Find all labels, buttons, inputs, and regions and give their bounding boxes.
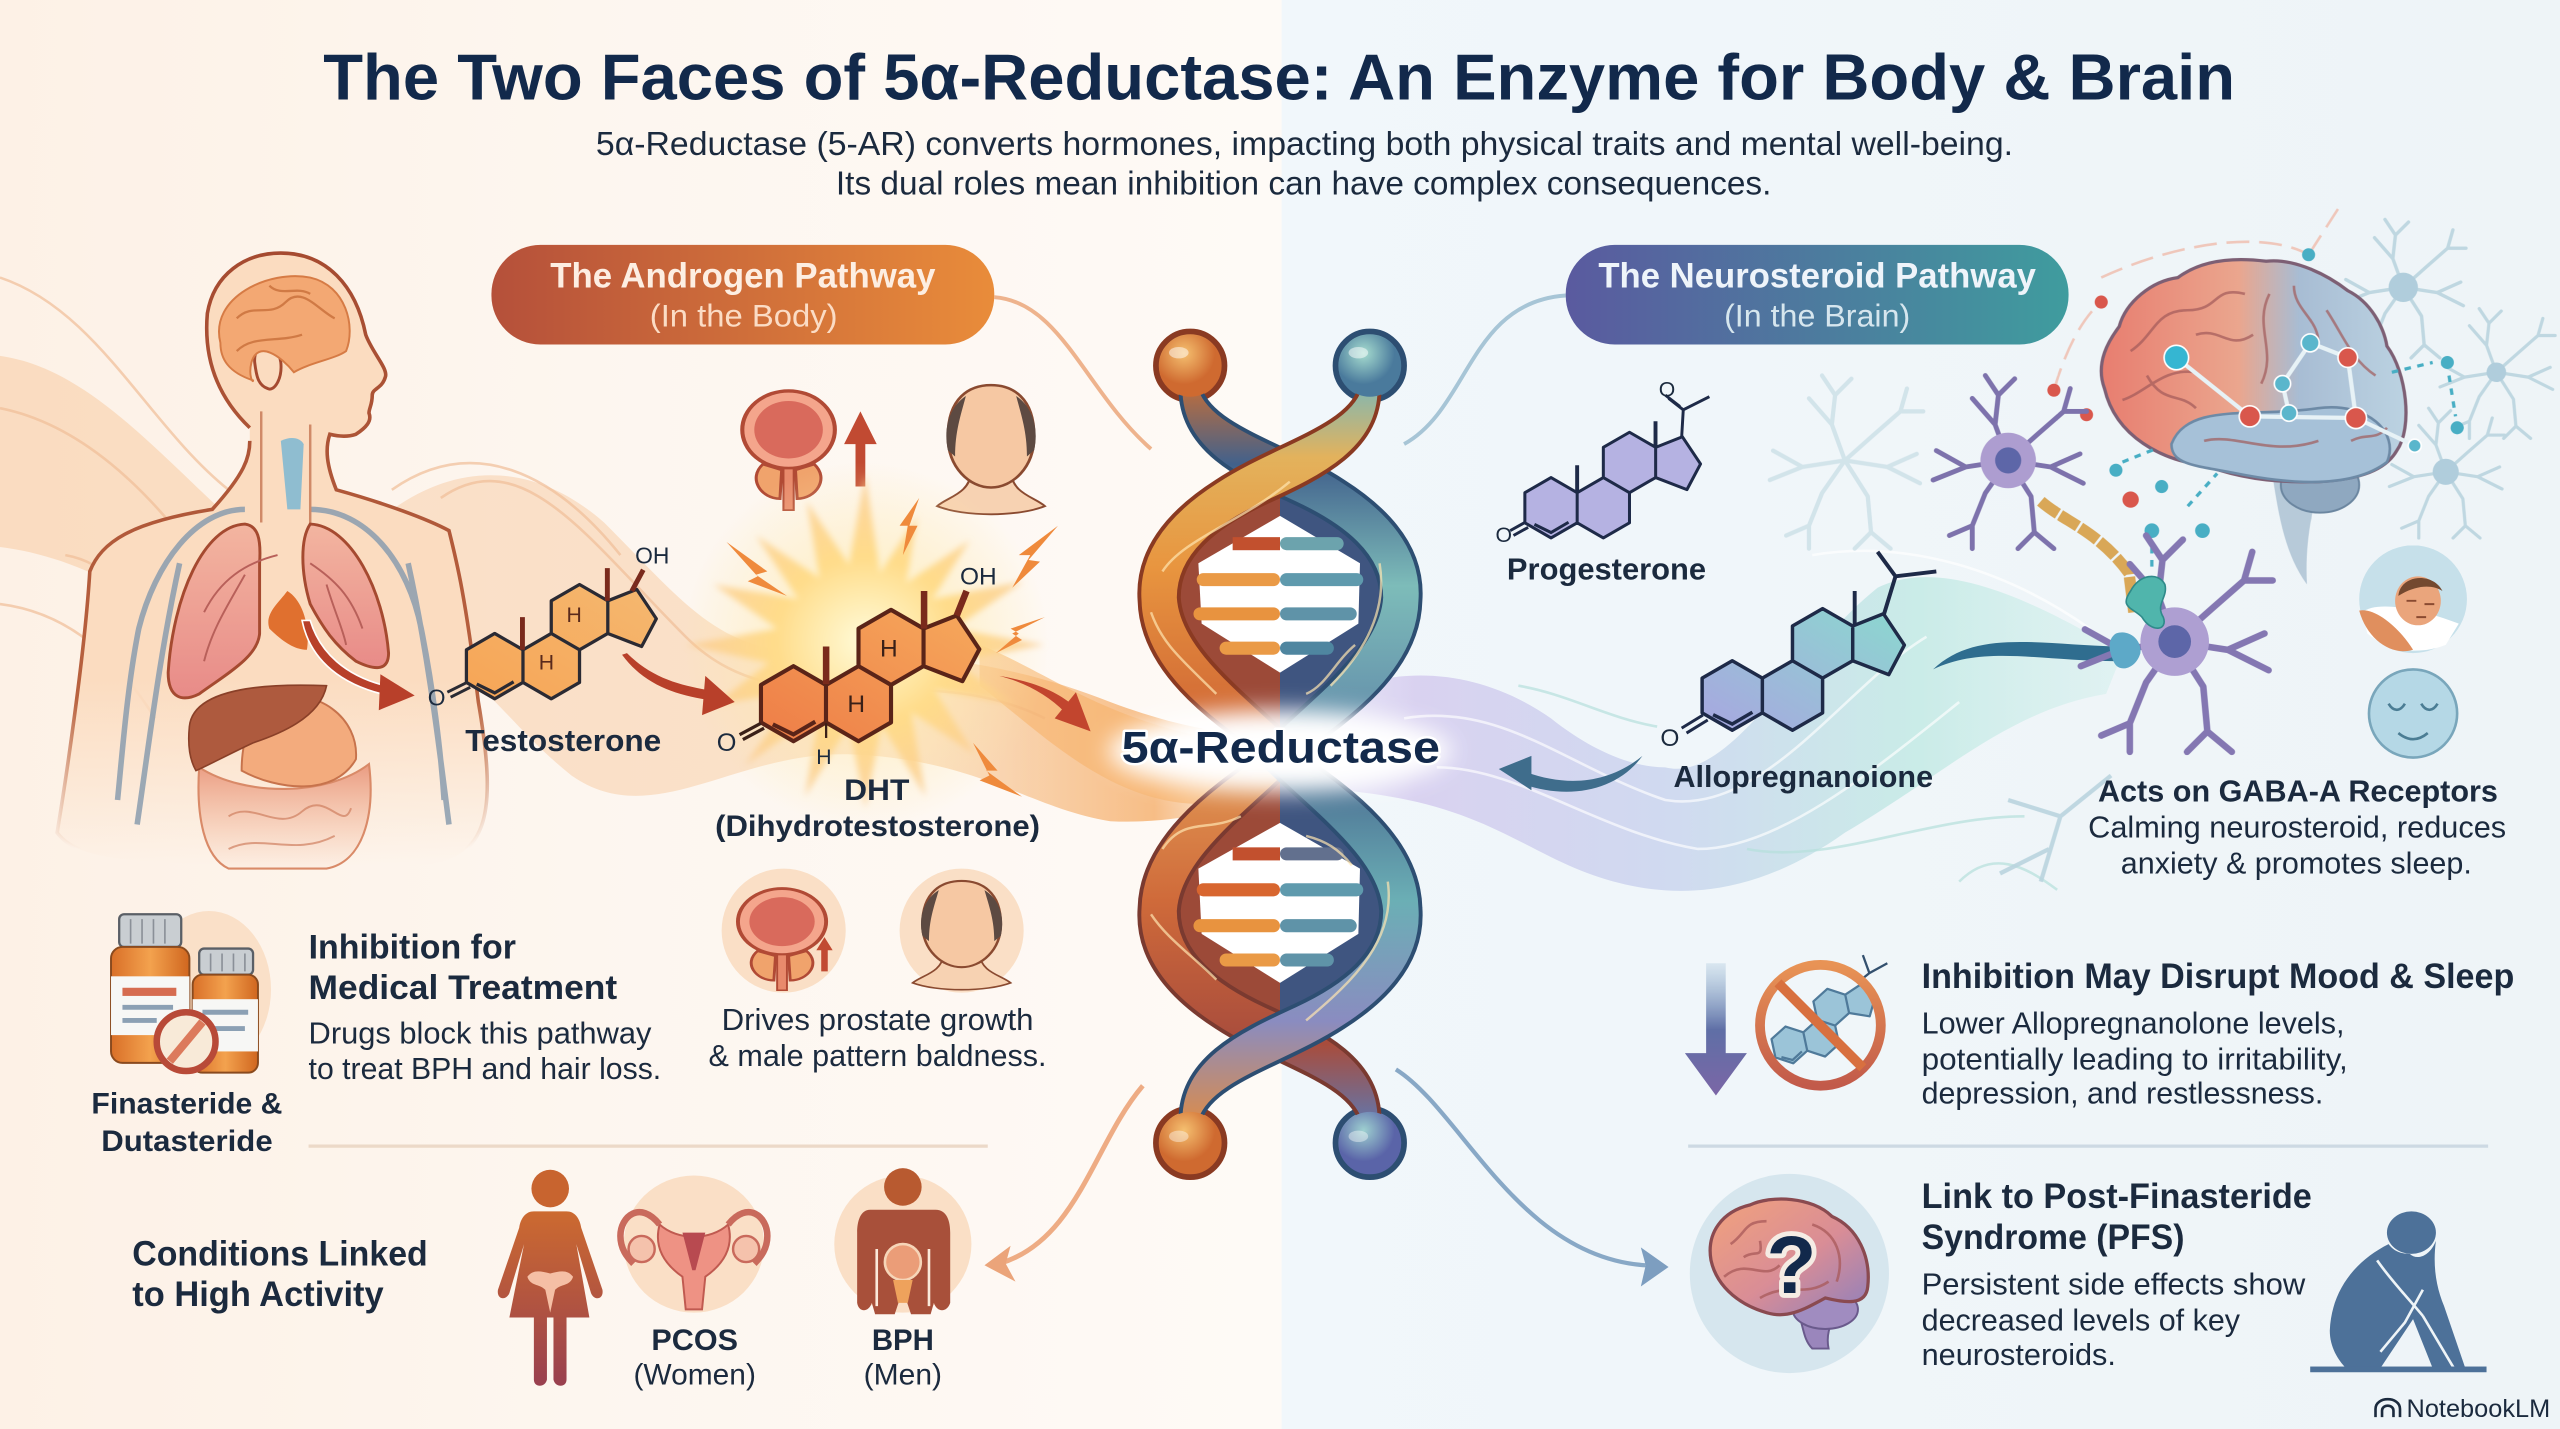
arrow: flow to neuron	[1933, 642, 2118, 669]
icon: balding head above	[937, 385, 1045, 514]
pill: androgen pathway: (In the Body)	[650, 299, 838, 334]
arrow: helix to conditions	[984, 1086, 1143, 1282]
stomach	[242, 696, 356, 786]
subtitle: Its dual roles mean inhibition can have complex consequences.	[836, 165, 1771, 202]
icon: balding head lower	[900, 869, 1024, 993]
icon: distressed seated figure	[2310, 1211, 2487, 1372]
label: finasteride and dutasteride	[91, 1087, 282, 1158]
molecule: DHT: O	[717, 729, 736, 757]
label: BPH men: (Men)	[864, 1358, 942, 1391]
pill: neurosteroid pathway: (In the Brain)	[1724, 299, 1910, 334]
heading: inhibition for medical treatment: Medical Treatment	[309, 969, 617, 1007]
molecule: testosterone	[428, 542, 669, 710]
molecule: testosterone: H	[567, 604, 582, 627]
icon: uterus PCOS	[620, 1176, 767, 1313]
rungs top	[1193, 537, 1363, 655]
icon: myelinated axon	[2041, 501, 2134, 612]
subtitle	[596, 126, 2013, 202]
heading: conditions linked: Conditions Linked	[132, 1234, 428, 1273]
helix ball fills	[1159, 335, 1401, 1174]
steroid starburst around DHT	[682, 462, 1058, 828]
text: drives prostate growth: & male pattern baldness.	[709, 1040, 1047, 1073]
icon: sleeping person	[2359, 545, 2467, 653]
background flow: androgen side	[0, 278, 1280, 822]
pill: neurosteroid pathway	[1566, 245, 2069, 344]
molecule: testosterone: H	[539, 651, 554, 674]
molecule: testosterone: O	[428, 684, 446, 710]
arrow: levels down	[1685, 963, 1747, 1096]
body outline	[57, 253, 487, 865]
heading: link to PFS	[1922, 1177, 2312, 1257]
heart	[268, 591, 308, 650]
center glow	[1109, 710, 1451, 792]
connector: neurosteroid pill to helix	[1404, 296, 1566, 444]
heading: inhibition may disrupt: Inhibition May Disrupt Mood & Sleep	[1922, 957, 2514, 996]
text: persistent side effects: decreased levels of key	[1922, 1305, 2241, 1338]
background flow: neurosteroid side	[1290, 551, 2122, 891]
molecule: DHT: H	[816, 746, 832, 769]
icon: calm face	[2369, 669, 2457, 758]
text: calming neurosteroid: Calming neurosteroid, reduces	[2088, 812, 2506, 845]
text: lower allopregnanolone: Lower Allopregnanolone levels,	[1922, 1007, 2344, 1040]
icon: medication bottles	[111, 911, 271, 1073]
label: testosterone: Testosterone	[465, 725, 661, 758]
heading: link to PFS: Syndrome (PFS)	[1922, 1218, 2184, 1257]
text: drives prostate growth: Drives prostate growth	[722, 1004, 1033, 1037]
heading: conditions linked: to High Activity	[132, 1275, 384, 1314]
arrow: DHT to enzyme	[999, 676, 1091, 731]
icon: woman figure	[498, 1170, 603, 1386]
text: drugs block this pathway	[309, 1017, 661, 1086]
connector: androgen pill to helix	[994, 297, 1151, 449]
arrow: helix to PFS	[1396, 1069, 1669, 1287]
pill: androgen pathway: The Androgen Pathway	[550, 256, 936, 295]
label: DHT: DHT	[844, 774, 909, 807]
icon: prostate above	[742, 391, 835, 510]
left background panel	[0, 0, 1283, 1429]
liver	[189, 685, 327, 771]
icon: prostate lower	[722, 869, 846, 993]
brain in head	[219, 276, 350, 381]
front strand top	[1139, 389, 1380, 754]
panel: human body	[57, 253, 487, 869]
text: persistent side effects	[1922, 1269, 2306, 1372]
label: allopregnanolone: Allopregnanoione	[1673, 761, 1933, 794]
intestines	[198, 764, 371, 869]
molecule: progesterone: O	[1496, 524, 1512, 547]
label: DHT: (Dihydrotestosterone)	[715, 810, 1040, 843]
label: finasteride and dutasteride: Dutasteride	[101, 1125, 273, 1158]
icon: blocked molecule	[1760, 955, 1887, 1086]
molecule: allopregnanolone: O	[1660, 725, 1679, 752]
molecule: DHT: H	[880, 635, 898, 662]
arrow: prostate growth up	[844, 411, 877, 487]
pale neurons background	[1770, 219, 2555, 882]
heading: link to PFS: Link to Post-Finasteride	[1922, 1177, 2312, 1216]
pill: neurosteroid pathway: The Neurosteroid Pathway	[1598, 256, 2036, 295]
text: drugs block this pathway: to treat BPH and hair loss.	[309, 1053, 661, 1086]
subtitle: 5α-Reductase (5-AR) converts hormones, impacting both physical traits and mental well-being.	[596, 126, 2013, 163]
arrow: allopregnanolone to enzyme	[1499, 756, 1642, 792]
icon: brain with question mark: ?	[1767, 1220, 1816, 1311]
icon: brain with question mark	[1690, 1174, 1889, 1373]
heading: inhibition for medical treatment	[309, 928, 617, 1007]
helix inner lens bottom	[1162, 767, 1280, 1045]
helix inner lens top	[1162, 473, 1280, 743]
heading: conditions linked	[132, 1234, 428, 1314]
label: DHT	[715, 774, 1040, 843]
pill: androgen pathway	[491, 245, 994, 344]
icon: man BPH	[834, 1168, 971, 1314]
vessels and arms	[118, 509, 449, 824]
icon: lower neuron with receptor	[2081, 536, 2273, 752]
helix white gaps	[1198, 516, 1360, 673]
label: progesterone: Progesterone	[1507, 554, 1706, 587]
lungs	[168, 524, 260, 698]
arrow: heart to testosterone	[302, 620, 415, 710]
text: lower allopregnanolone: potentially leading to irritability,	[1922, 1043, 2348, 1076]
text: lower allopregnanolone	[1922, 1007, 2348, 1111]
text: persistent side effects: neurosteroids.	[1922, 1339, 2116, 1372]
panel: DNA helix	[1109, 331, 1451, 1177]
strand highlights	[1151, 482, 1389, 1020]
text: calming neurosteroid	[2088, 812, 2506, 880]
right background panel	[1282, 0, 2560, 1429]
label: BPH men: BPH	[872, 1324, 934, 1357]
molecule: allopregnanolone	[1660, 552, 1936, 752]
molecule: DHT	[717, 563, 997, 769]
molecule: DHT: OH	[960, 563, 997, 590]
title: The Two Faces of 5α-Reductase: An Enzyme for Body & Brain	[323, 41, 2235, 114]
trachea	[281, 438, 304, 509]
rungs bottom	[1193, 847, 1363, 967]
label: BPH men	[864, 1324, 942, 1391]
back strand top	[1180, 389, 1421, 754]
front strand bottom	[1180, 754, 1421, 1120]
network links	[2176, 343, 2415, 446]
logo: NotebookLM: NotebookLM	[2407, 1395, 2550, 1423]
molecule: DHT: H	[847, 691, 865, 718]
text: persistent side effects: Persistent side effects show	[1922, 1269, 2305, 1302]
signal dots	[2047, 209, 2464, 571]
icon: brain with network	[2101, 260, 2421, 584]
text: lower allopregnanolone: depression, and restlessness.	[1922, 1078, 2323, 1111]
text: calming neurosteroid: anxiety & promotes sleep.	[2121, 847, 2472, 880]
center label: 5α-Reductase: 5α-Reductase	[1122, 723, 1440, 772]
icon: upper neuron	[1933, 376, 2087, 549]
heading: inhibition for medical treatment: Inhibition for	[309, 928, 516, 966]
text: drugs block this pathway: Drugs block this pathway	[309, 1017, 652, 1050]
arrow: testosterone to DHT	[622, 653, 735, 715]
molecule: progesterone	[1496, 379, 1709, 547]
heading: GABA-A receptors: Acts on GABA-A Receptors	[2098, 776, 2498, 809]
label: PCOS women: PCOS	[651, 1324, 738, 1357]
molecule: progesterone: O	[1659, 379, 1675, 402]
ear	[255, 345, 281, 389]
text: drives prostate growth	[709, 1004, 1047, 1073]
helix ball outlines	[1156, 331, 1404, 1177]
back strand bottom	[1139, 754, 1380, 1120]
label: finasteride and dutasteride: Finasteride &	[91, 1087, 282, 1120]
label: PCOS women: (Women)	[633, 1358, 756, 1391]
label: PCOS women	[633, 1324, 756, 1391]
molecule: testosterone: OH	[635, 542, 669, 568]
